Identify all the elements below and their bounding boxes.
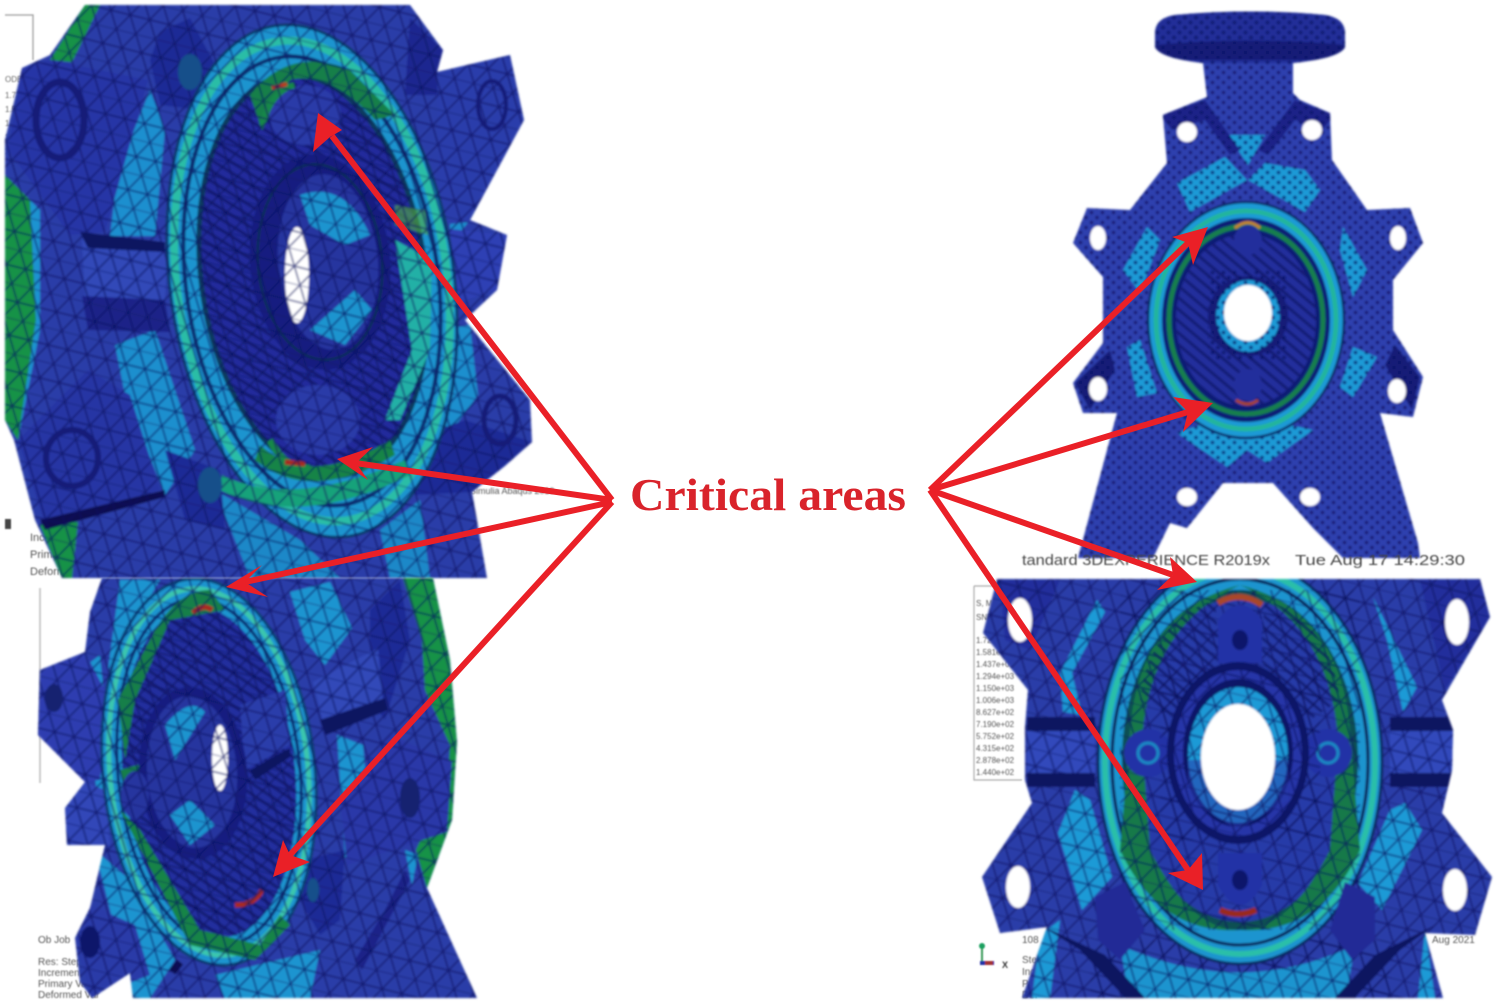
cyan outer bands: [1060, 600, 1105, 715]
text: top-left legend fragments: 1.29e: [5, 133, 26, 142]
green rim: [403, 578, 457, 888]
legend: stress values: 1.150e+03: [976, 684, 1015, 693]
text: left panel notes: Deformed: [30, 566, 78, 578]
text: left panel notes: Primary: [30, 549, 68, 561]
main rings: [164, 22, 460, 540]
bolt recesses: [36, 82, 84, 158]
text: top-left legend fragments: [5, 15, 33, 156]
legend: stress values: 8.627e+02: [976, 708, 1015, 717]
arrows: right critical areas: [930, 227, 1213, 890]
legend: stress values: S, Mises: [976, 599, 1007, 608]
text: left panel notes: Deformed Var: [38, 990, 100, 1001]
text: top-left legend fragments: ODB: [5, 75, 22, 84]
strut: [313, 648, 383, 722]
legend: stress values: 1.581e+03: [976, 648, 1015, 657]
panel: top-left stress model: [0, 0, 540, 580]
legend: stress values: SNEG: [976, 613, 999, 622]
upper and lower lugs: [8, 60, 148, 235]
text: left panel notes: Res: Step: [38, 957, 82, 968]
title: critical areas label: Critical areas: [630, 469, 906, 520]
text: top-left legend fragments: 1.58e: [5, 105, 26, 114]
legend: stress values: 1.725e+03: [976, 636, 1015, 645]
text: left panel notes: Ob Job: [38, 935, 71, 946]
green outer rim: [5, 5, 100, 578]
icon: axis triad: X: [1002, 960, 1008, 970]
text: bottom-right notes: Prim: [1022, 979, 1043, 990]
icon: axis triad: [979, 943, 1008, 970]
panel: top-right stress model: [1072, 10, 1424, 560]
main rings: [1148, 202, 1344, 438]
text: bottom-right notes: Incr: [1022, 967, 1039, 978]
struts: [1027, 730, 1095, 773]
text: bottom-right notes: Step: [1022, 955, 1043, 966]
stress hot spots: [262, 85, 295, 125]
text: top-left legend fragments: 1.72e: [5, 91, 26, 100]
dark lugs: [40, 658, 107, 782]
hub: [138, 687, 248, 860]
text: bottom-right notes: Aug 2021: [1432, 935, 1475, 946]
text: left panel notes: Increment: [38, 968, 83, 979]
stress hot spots: [193, 607, 212, 613]
cyan outer bands: [110, 90, 165, 236]
bolt recesses: [45, 684, 63, 712]
legend: stress values: 1.294e+03: [976, 672, 1015, 681]
bolt holes: [1177, 122, 1197, 142]
panel: bottom-left stress model: [36, 576, 478, 1000]
strut blocks: [82, 240, 168, 300]
stripe panels: [1140, 600, 1220, 720]
hub rings: [1167, 662, 1309, 844]
legend: stress values: 1.440e+02: [976, 768, 1015, 777]
dark outlines: [1075, 350, 1115, 410]
lower cyan arc: [1120, 948, 1354, 1000]
text: top-left legend fragments: 1.43e: [5, 119, 26, 128]
hub lobes: [1218, 605, 1262, 663]
text: left panel notes: Primary Var: [38, 979, 91, 990]
legend: stress values: 7.190e+02: [976, 720, 1015, 729]
legend: stress values: 1.006e+03: [976, 696, 1015, 705]
text: job header: [1022, 552, 1465, 569]
text: left panel notes: [5, 486, 555, 1001]
strut inner: [240, 690, 290, 770]
legend: stress values: 5.752e+02: [976, 732, 1015, 741]
cyan patches: [1177, 157, 1247, 212]
bolt holes: [1201, 704, 1275, 810]
text: job header: tandard 3DEXPERIENCE R2019x: [1022, 552, 1271, 569]
legend: stress values: 2.878e+02: [976, 756, 1015, 765]
dark square lugs: [1095, 882, 1145, 960]
text: job header: Tue Aug 17 14:29:30: [1295, 552, 1465, 569]
cyan bands: [290, 582, 352, 665]
text: top-left legend fragments: 1.15e: [5, 147, 26, 156]
legend: stress values: 4.315e+02: [976, 744, 1015, 753]
panel: bottom-right stress model: [975, 560, 1500, 1003]
text: bottom-right notes: 108: [1022, 935, 1039, 946]
main rings: [1098, 560, 1382, 964]
text: left panel notes: Simulia Abaqus 2019: [470, 486, 555, 496]
legend: stress values: [974, 586, 1022, 780]
arrows: left critical areas: [226, 113, 612, 877]
legend: stress values: 1.437e+03: [976, 660, 1015, 669]
main rings: [99, 577, 319, 968]
upper and lower bumps: [269, 85, 341, 145]
text: left panel notes: Increment: [30, 532, 79, 544]
text: bottom-right notes: Def: [1022, 990, 1038, 1001]
hub: [249, 154, 391, 370]
text: bottom-right notes: [1022, 935, 1475, 1001]
